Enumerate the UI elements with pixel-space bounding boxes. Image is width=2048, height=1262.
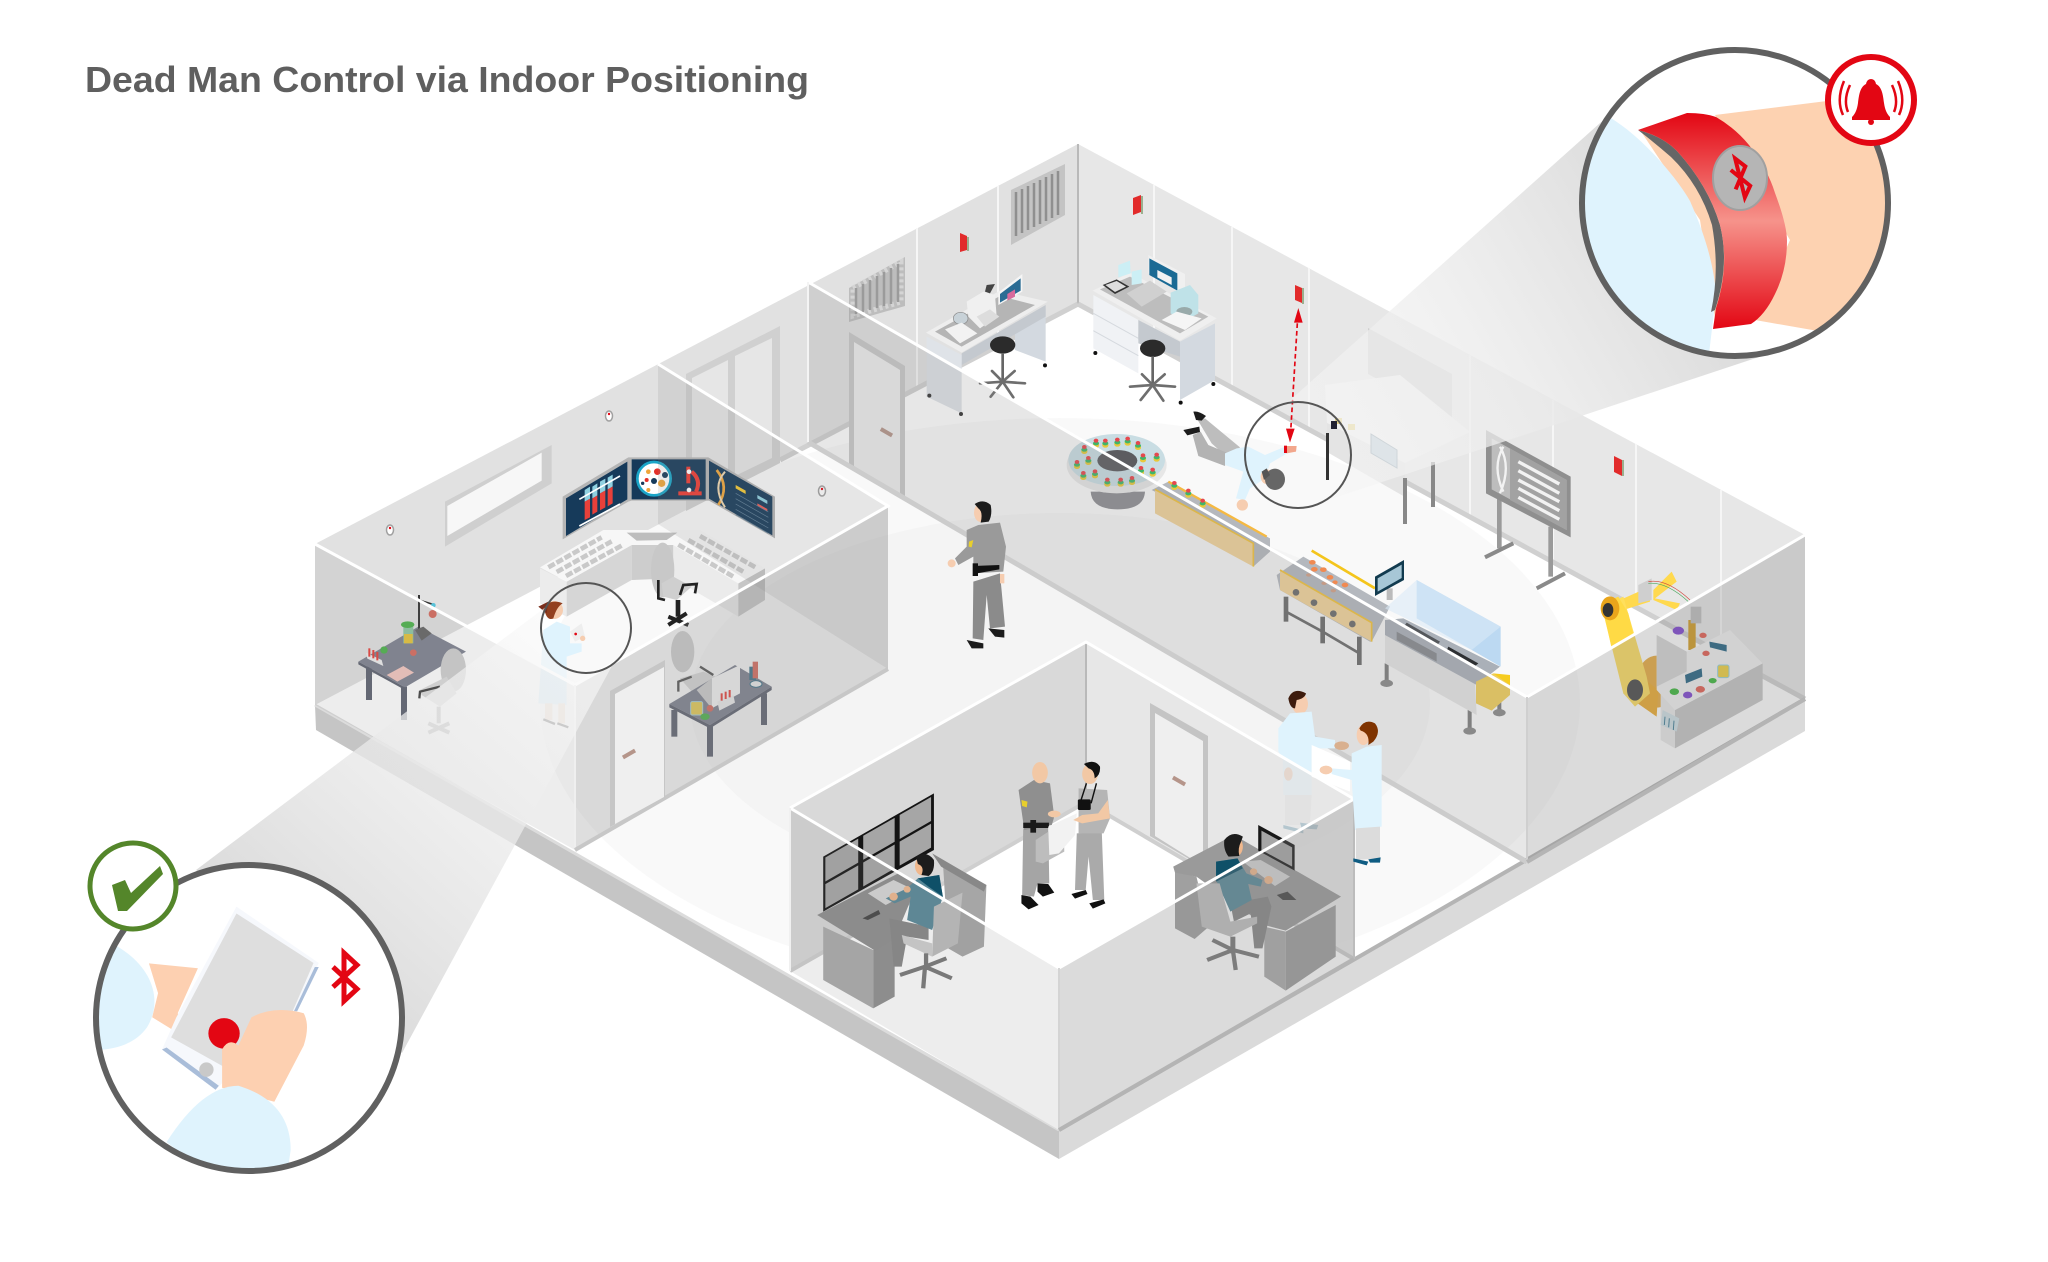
right operator desk	[1173, 825, 1341, 991]
window	[445, 445, 552, 547]
left operator	[886, 854, 962, 988]
red wall alarm boxes	[960, 195, 1624, 476]
left operator desk	[817, 853, 986, 1008]
left room walls, translucent	[315, 364, 888, 850]
inspection machine, DNA board and robot	[1380, 430, 1763, 748]
wall vents	[849, 164, 1065, 322]
second conveyor with parts and monitor	[1277, 551, 1404, 665]
security guard holding paper	[1019, 762, 1077, 909]
lab bench 1 with stool	[926, 274, 1048, 416]
photographer	[1071, 762, 1110, 909]
double door and single door on the back wall	[686, 326, 905, 511]
scientist on the left of handshake	[1278, 691, 1349, 833]
fallen worker wearing wristband	[1183, 412, 1297, 511]
ghost control panel machine under projection cone	[1325, 328, 1470, 524]
green check badge	[90, 843, 176, 929]
right operator	[1196, 834, 1273, 970]
alarm bell badge	[1828, 57, 1914, 143]
small locator circle on fallen worker	[1245, 402, 1351, 508]
console desk with key panels	[540, 530, 765, 617]
front room contents	[817, 762, 1341, 1008]
wall sensors	[386, 411, 826, 535]
magnified wristband circle	[1560, 50, 1895, 356]
robot work table with flasks	[1657, 627, 1763, 748]
left lab desk	[358, 595, 466, 720]
scientist on the right of handshake	[1312, 722, 1382, 865]
big lab room right wall, translucent	[1527, 535, 1805, 862]
title: Dead Man Control via Indoor Positioning	[85, 59, 809, 100]
inspection machine	[1380, 580, 1510, 735]
front room translucent front walls	[790, 642, 1354, 1130]
big lab room front wall, translucent	[808, 282, 1527, 862]
front room: floor and back walls	[790, 642, 1354, 1130]
red dashed arrow from wristband to receiver	[1286, 308, 1303, 443]
left room chair	[419, 648, 466, 733]
rotary feeder	[1067, 434, 1167, 509]
small locator circle on nurse	[541, 583, 631, 673]
projection cone to wristband circle	[1287, 115, 1762, 502]
big lab room contents	[926, 255, 1303, 511]
lab bench 2 with stool	[1093, 255, 1217, 405]
wall display screens	[563, 457, 775, 539]
console chair	[651, 543, 697, 625]
building shell: slab, floor and back walls	[315, 144, 1805, 1159]
magnified phone circle	[65, 865, 402, 1174]
nurse pressing handset	[538, 601, 585, 727]
robot arm	[1601, 572, 1701, 717]
projection cone to phone circle	[196, 606, 613, 1053]
DNA info board	[1485, 430, 1571, 588]
right room desk and chair	[669, 631, 772, 757]
CCTV monitor wall	[823, 793, 934, 912]
short conveyor with bottles	[1152, 481, 1270, 567]
left room contents	[358, 445, 775, 757]
rotary bottle feeder and conveyors	[1067, 434, 1404, 665]
security guard walking in corridor	[948, 501, 1006, 648]
